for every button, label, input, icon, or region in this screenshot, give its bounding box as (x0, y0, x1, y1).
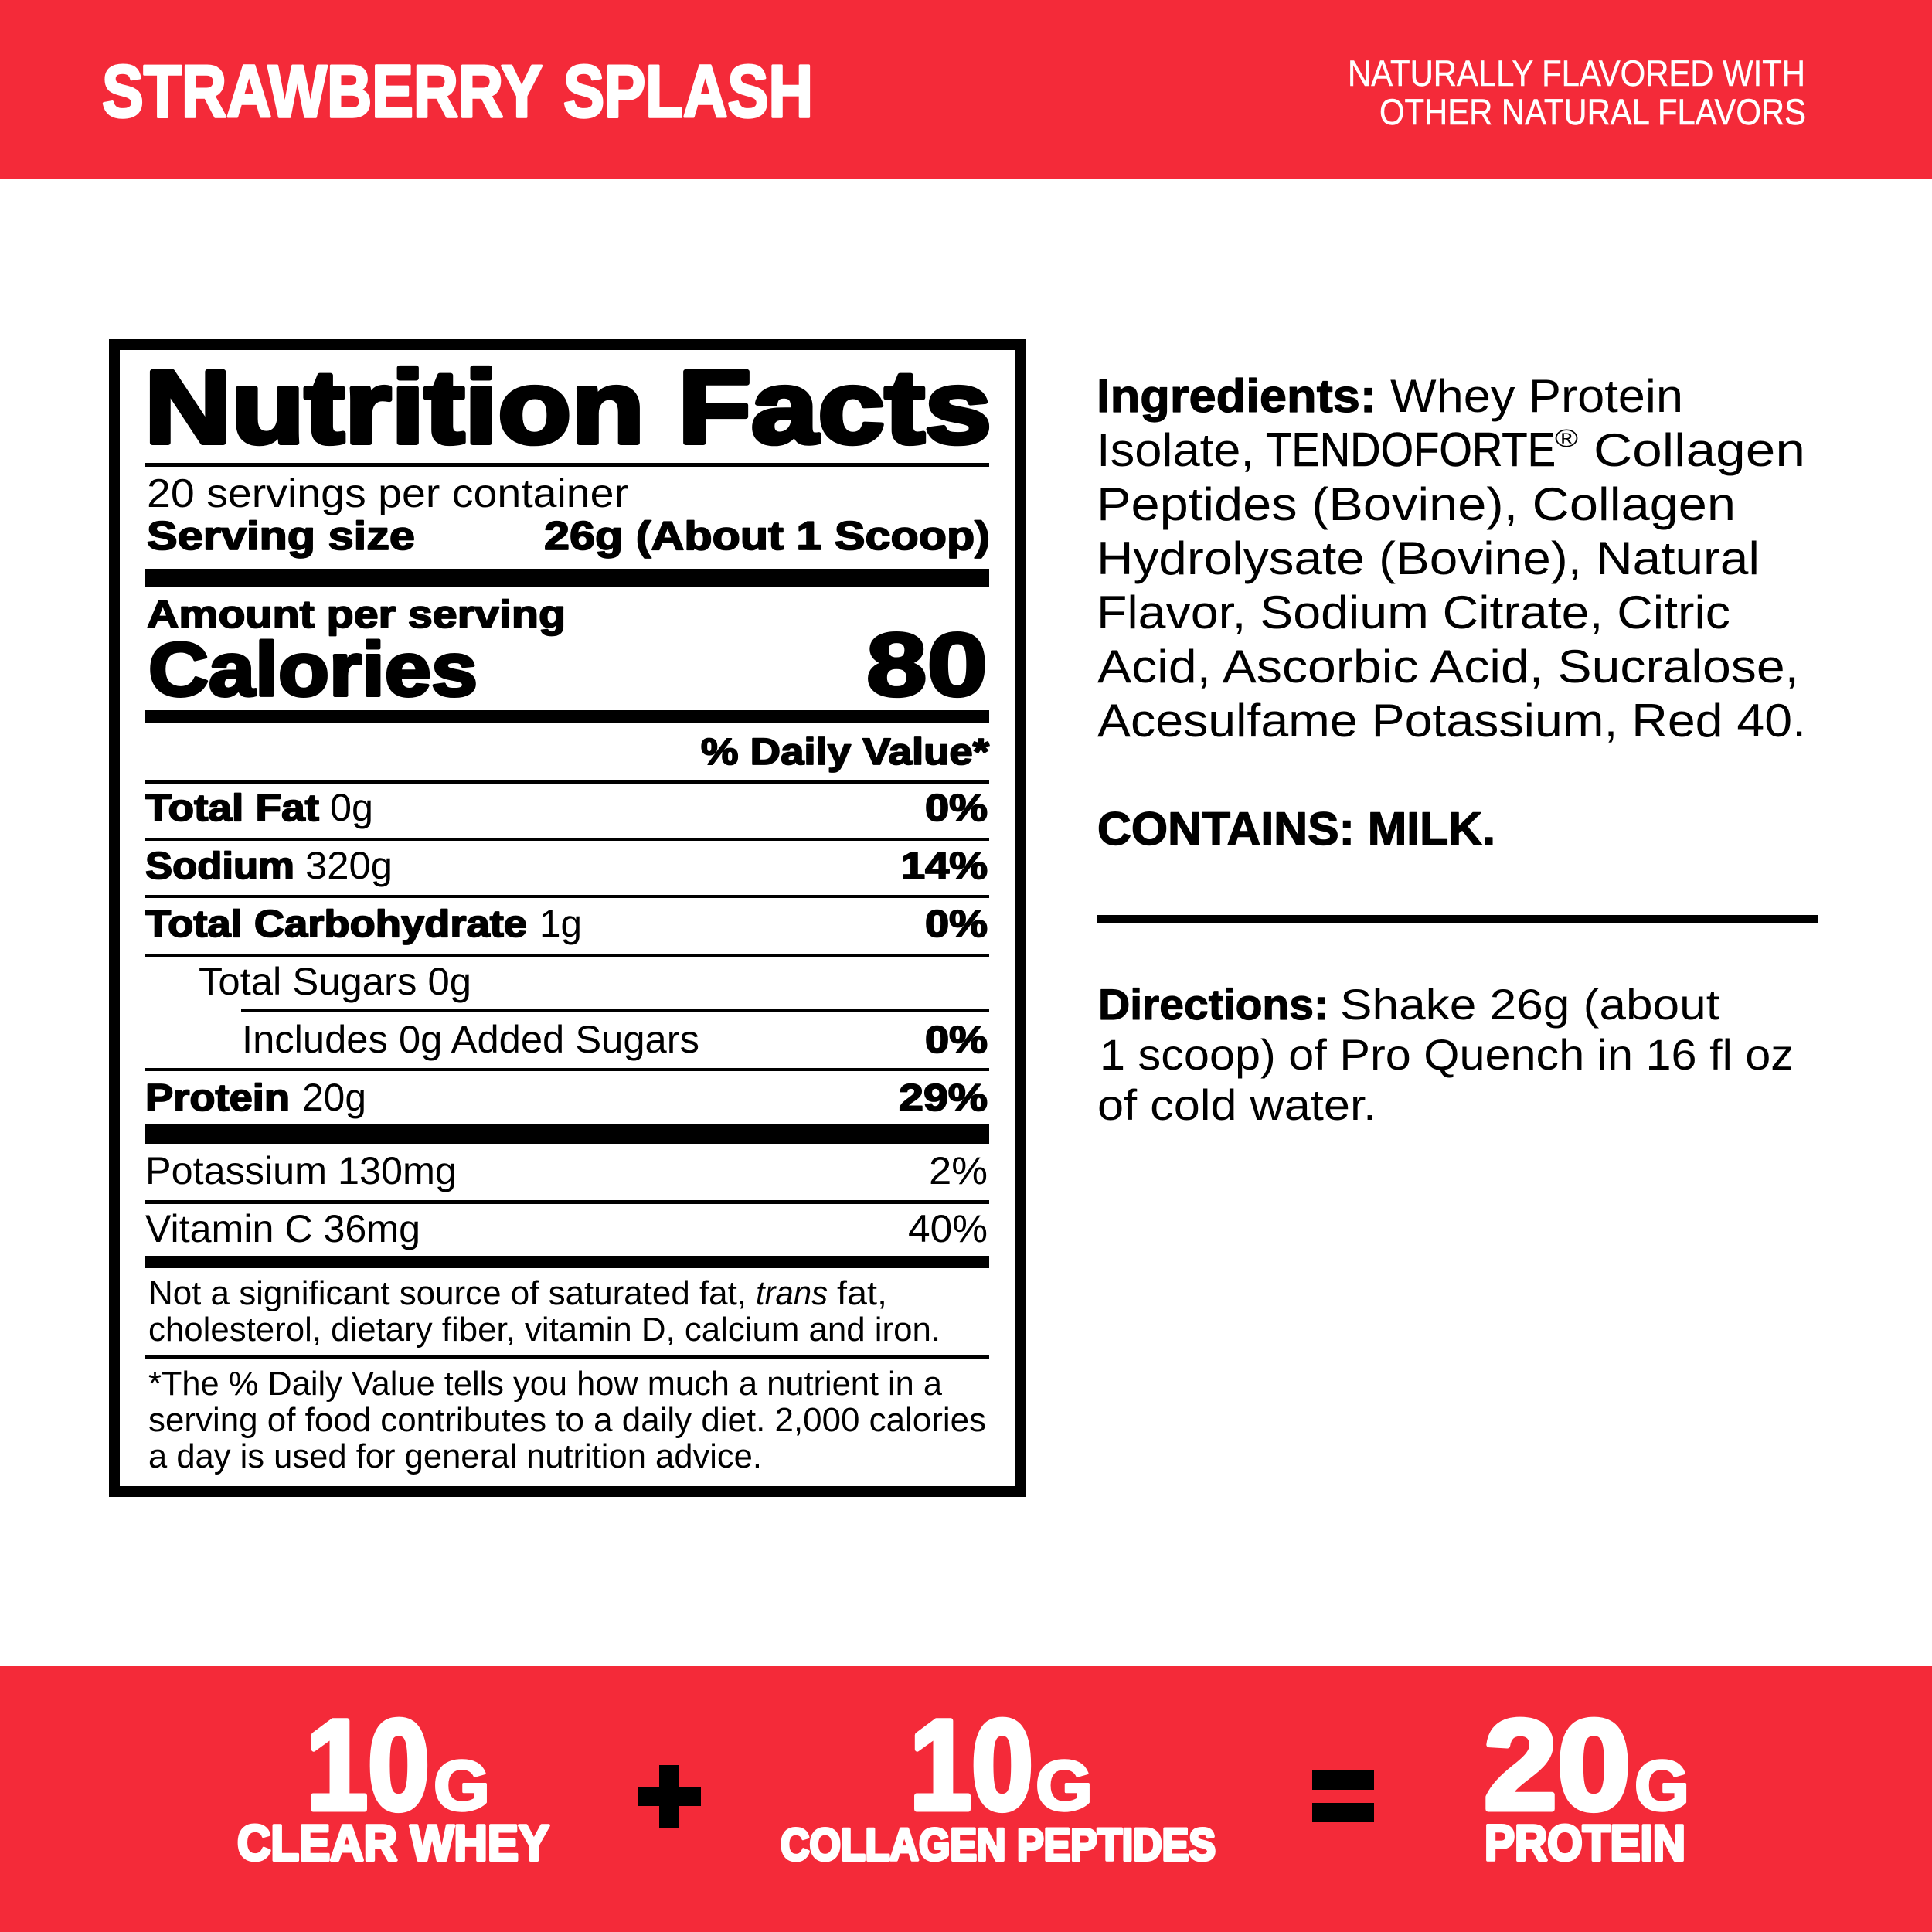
row: total fat: Total Fat (145, 787, 319, 829)
row: added sugars: Includes 0g Added Sugars (242, 1018, 699, 1061)
text: calories (148, 614, 988, 715)
row: protein: Protein (145, 1077, 290, 1119)
text block: ingredients: Peptides (Bovine), Collagen (1097, 478, 1736, 530)
text block: ingredients: TENDOFORTE (1266, 423, 1556, 477)
text block: ingredients: Isolate, (1097, 424, 1254, 476)
text block: ingredients (1097, 370, 1806, 747)
stat: 20g protein: PROTEIN (1485, 1815, 1685, 1871)
row: vitamin C: 40% (908, 1207, 988, 1250)
text: serving size (147, 514, 990, 559)
text block: ingredients: ® (1555, 424, 1579, 452)
text: daily value footnote: *The % Daily Value tells you how much a nutrient in a (148, 1365, 943, 1403)
row: potassium: Potassium 130mg (145, 1149, 457, 1192)
text block: ingredients: Whey Protein (1390, 370, 1683, 422)
text block: directions: 1 scoop) of Pro Quench in 16 fl oz (1100, 1030, 1794, 1079)
row: total carbohydrate: 0% (925, 903, 988, 945)
text: serving size: Serving size (147, 514, 415, 559)
text: calories: 80 (866, 614, 988, 715)
row: total fat (145, 786, 988, 829)
row: total fat: 0g (330, 786, 373, 829)
row: protein (145, 1076, 988, 1119)
text: daily value footnote: a day is used for general nutrition advice. (148, 1437, 762, 1475)
text: not a significant source note: Not a significant source of saturated fat, (148, 1274, 747, 1312)
panel: bottom protein equation band (0, 1666, 1932, 1932)
row: sodium: 14% (901, 845, 988, 887)
text: servings per container: 20 servings per container (147, 471, 628, 516)
stat: 10g collagen peptides: COLLAGEN PEPTIDES (781, 1820, 1216, 1870)
text block: ingredients: Acesulfame Potassium, Red 40. (1097, 695, 1806, 747)
row: total carbohydrate: Total Carbohydrate (145, 903, 527, 945)
text block: ingredients: Flavor, Sodium Citrate, Citric (1097, 587, 1730, 638)
heading: flavor name: SPLASH (563, 50, 813, 133)
icon: plus sign (638, 1765, 701, 1828)
text block: ingredients: Acid, Ascorbic Acid, Sucralose, (1097, 641, 1799, 692)
row: protein: 20g (302, 1076, 366, 1119)
row: total sugars: Total Sugars 0g (199, 960, 471, 1003)
text: natural flavor note (1348, 53, 1806, 132)
text: not a significant source note: fat, (837, 1274, 887, 1312)
text: daily value footnote (148, 1365, 986, 1475)
heading: Nutrition Facts: Nutrition Facts (145, 350, 992, 465)
row: total fat: 0% (925, 787, 988, 829)
row: potassium: 2% (929, 1149, 988, 1192)
row: total carbohydrate: 1g (539, 902, 582, 945)
row: added sugars (242, 1018, 988, 1061)
row: total carbohydrate (145, 902, 988, 945)
row: vitamin C: Vitamin C 36mg (145, 1207, 420, 1250)
row: sodium: 320g (305, 844, 393, 887)
text block: directions: Directions: (1098, 980, 1328, 1029)
row: protein: 29% (899, 1077, 988, 1119)
stat: 10g collagen peptides: G (1036, 1747, 1093, 1825)
icon: equals sign (1312, 1770, 1374, 1822)
stat: 20g protein: G (1634, 1747, 1689, 1825)
row: added sugars: 0% (925, 1019, 988, 1061)
text block: ingredients: Hydrolysate (Bovine), Natural (1097, 532, 1760, 584)
text block: directions (1097, 980, 1794, 1129)
text: calories: Calories (148, 627, 478, 712)
stat: 10g collagen peptides: 10 (910, 1694, 1033, 1837)
stat: 20g protein: 20 (1484, 1694, 1631, 1837)
text: allergen statement: CONTAINS: MILK. (1097, 803, 1495, 855)
row: sodium: Sodium (145, 845, 294, 887)
text: daily value header: % Daily Value* (701, 732, 989, 773)
row: potassium (145, 1149, 988, 1192)
panel: top header band (0, 0, 1932, 179)
text: not a significant source note: cholesterol, dietary fiber, vitamin D, calcium and iron. (148, 1311, 940, 1349)
row: vitamin C (145, 1207, 988, 1250)
text block: directions: Shake 26g (about (1340, 980, 1719, 1029)
stat: 10g clear whey: G (434, 1747, 490, 1825)
stat: 10g clear whey: 10 (306, 1694, 430, 1837)
text: not a significant source note: trans (756, 1274, 828, 1312)
text block: ingredients: Collagen (1594, 424, 1805, 476)
text block: directions: of cold water. (1097, 1080, 1376, 1129)
text: serving size: 26g (About 1 Scoop) (544, 514, 990, 559)
row: sodium (145, 844, 988, 887)
heading: flavor name: STRAWBERRY (102, 50, 543, 133)
stat: 10g clear whey: CLEAR WHEY (237, 1815, 549, 1871)
text block: ingredients: Ingredients: (1097, 370, 1376, 422)
stat: 20g protein (1484, 1694, 1689, 1871)
panel: nutrition facts label (114, 345, 1021, 1492)
text: natural flavor note: OTHER NATURAL FLAVORS (1379, 91, 1806, 132)
text: amount per serving: Amount per serving (147, 593, 566, 636)
stat: 10g collagen peptides (781, 1694, 1216, 1870)
text: natural flavor note: NATURALLY FLAVORED WITH (1348, 53, 1805, 94)
text: not a significant source note (148, 1274, 940, 1349)
stat: 10g clear whey (237, 1694, 549, 1871)
text: daily value footnote: serving of food contributes to a daily diet. 2,000 calories (148, 1401, 986, 1439)
